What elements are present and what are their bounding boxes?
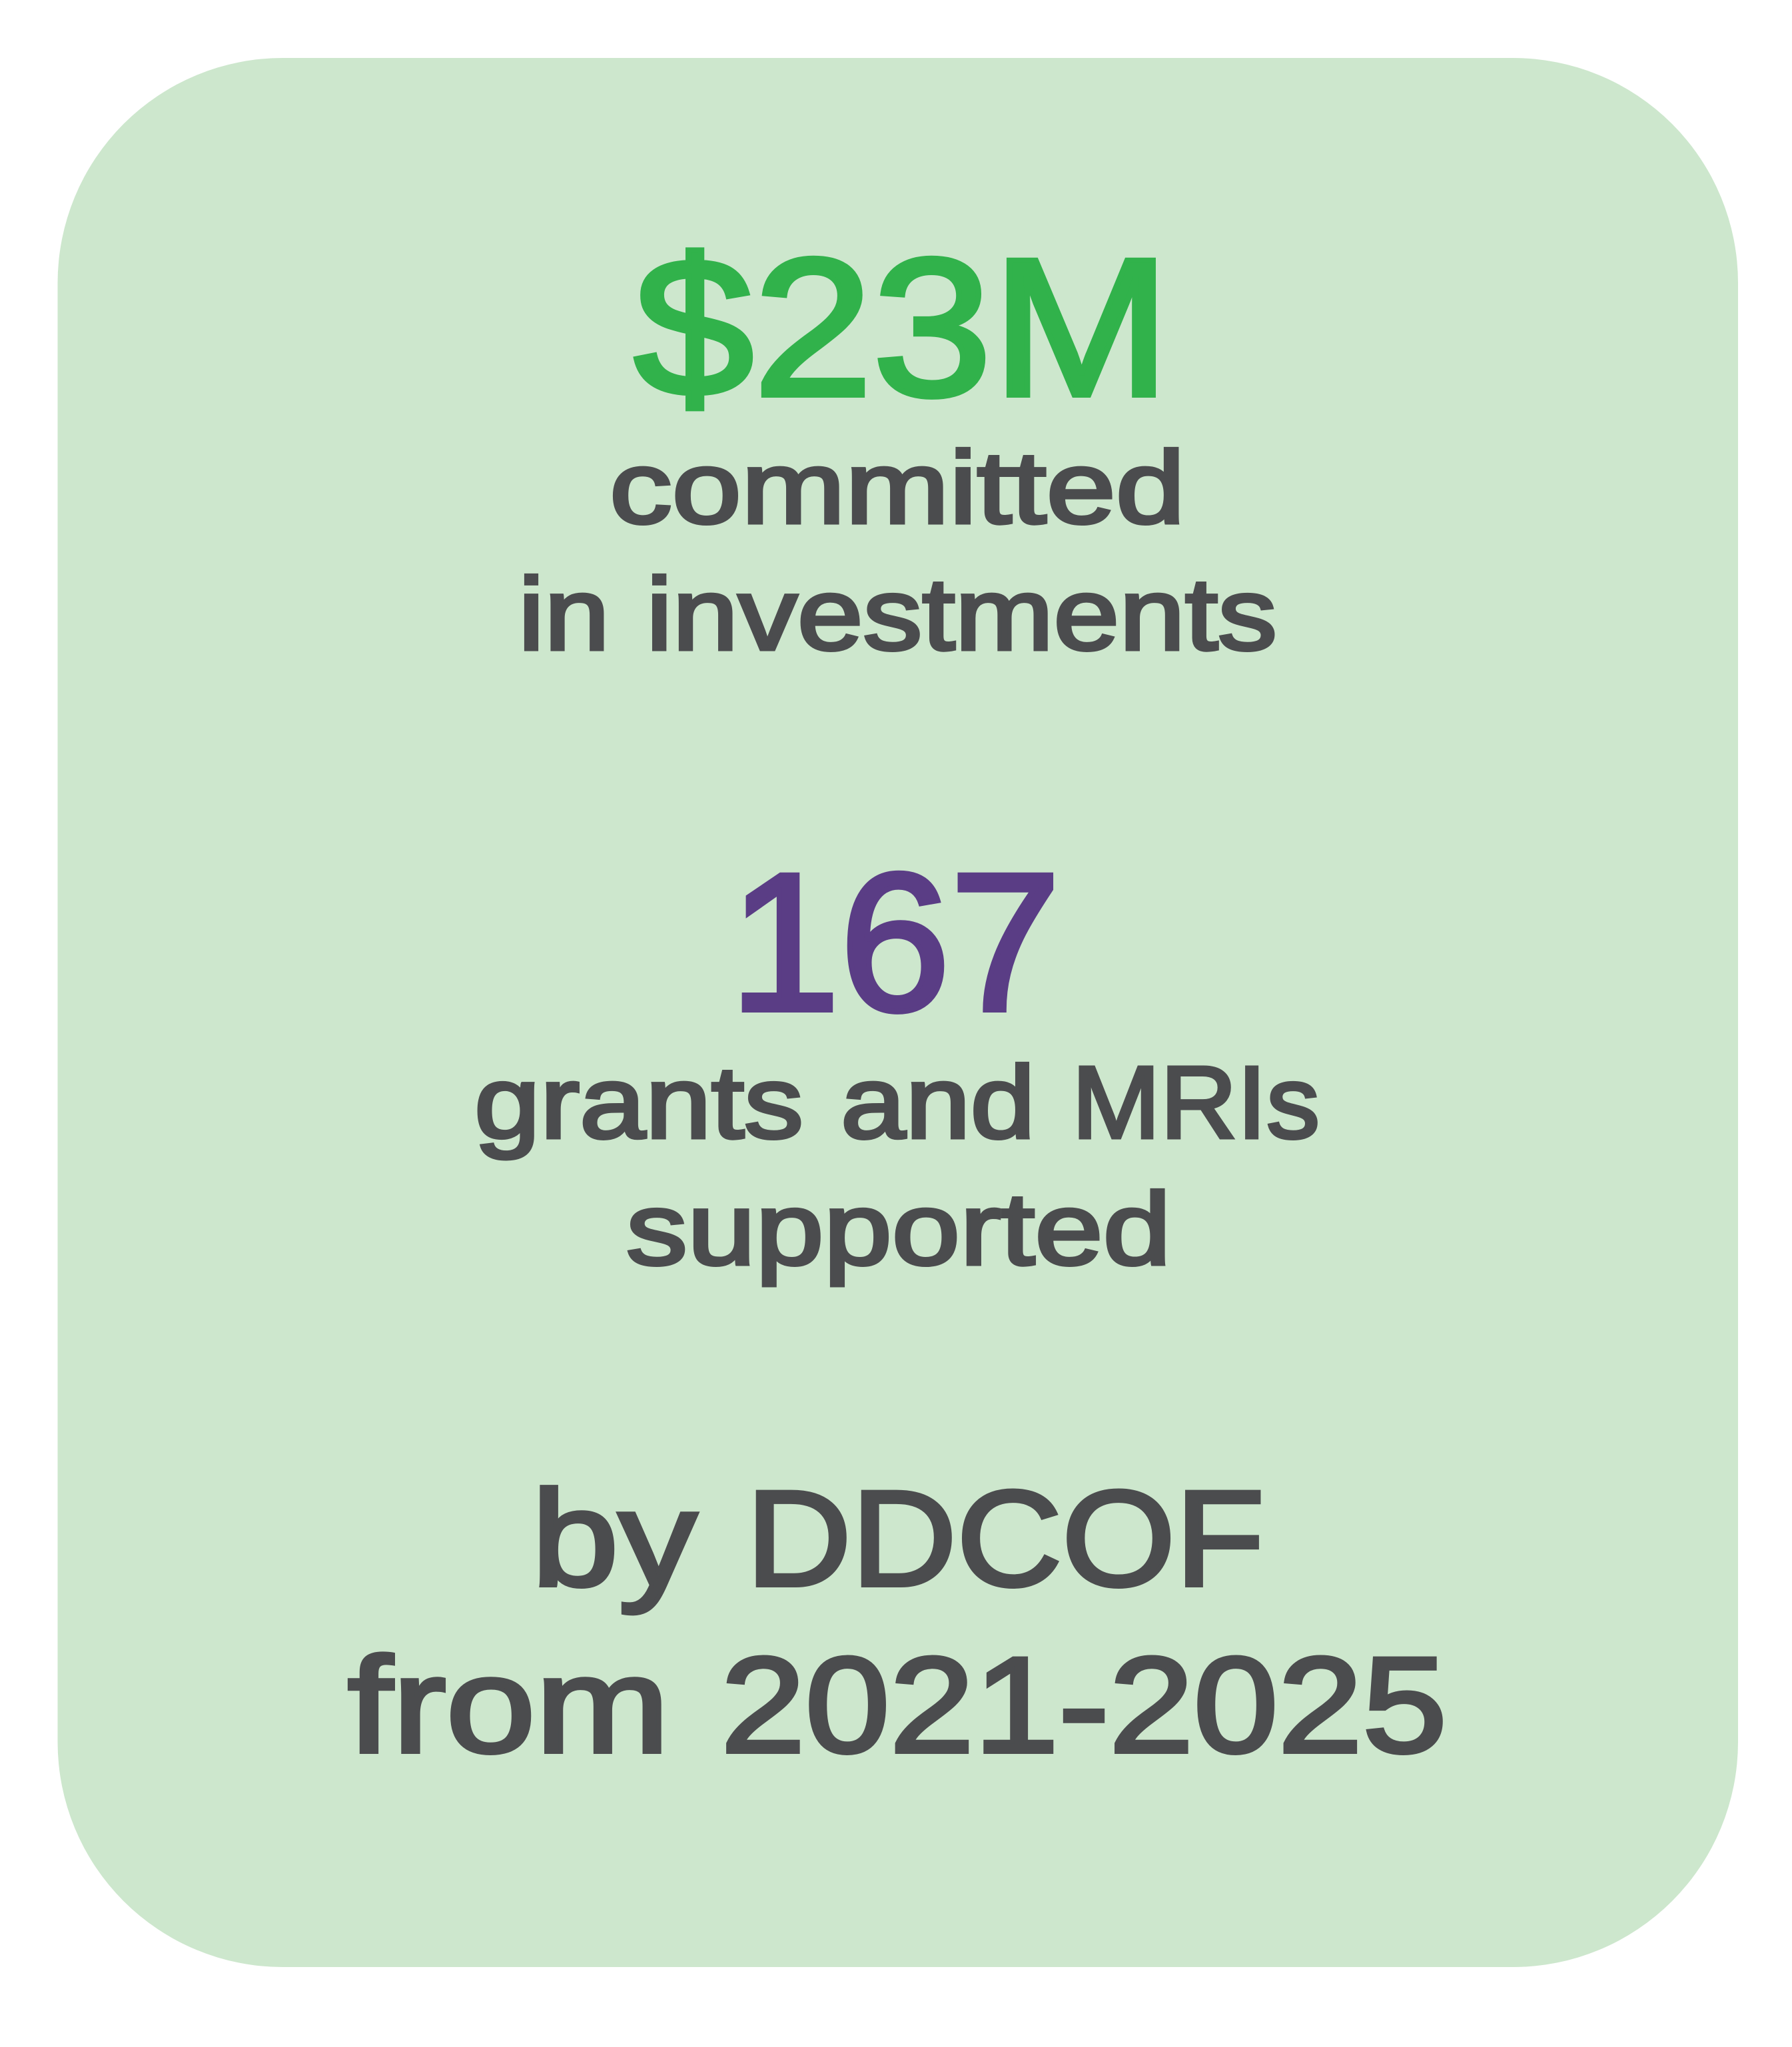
stat: 167 grants and MRIs supported bbox=[474, 833, 1320, 1286]
label: grants and MRIs: grants bbox=[474, 1045, 803, 1160]
label: committed: committed bbox=[610, 430, 1185, 545]
stat: $23M committed in investments bbox=[518, 218, 1277, 671]
label: grants and MRIs: MRIs bbox=[1072, 1045, 1320, 1160]
text: by DDCOF: by bbox=[532, 1463, 697, 1615]
text: from 2021-2025: 2021-2025 bbox=[721, 1629, 1447, 1781]
text: from 2021-2025: from bbox=[348, 1629, 670, 1781]
label: grants and MRIs bbox=[474, 1045, 1320, 1160]
text: by DDCOF bbox=[532, 1463, 1264, 1615]
big number: 167: 167 bbox=[729, 833, 1061, 1052]
label: grants and MRIs: and bbox=[841, 1045, 1035, 1160]
text: by DDCOF: DDCOF bbox=[746, 1463, 1264, 1615]
big number: $23M: $23M bbox=[634, 218, 1170, 437]
label: in investments: in bbox=[518, 557, 610, 671]
closing statement: by DDCOF from 2021-2025 bbox=[348, 1463, 1447, 1781]
label: supported: supported bbox=[626, 1172, 1171, 1286]
text: from 2021-2025 bbox=[348, 1629, 1447, 1781]
label: in investments: investments bbox=[646, 557, 1277, 671]
